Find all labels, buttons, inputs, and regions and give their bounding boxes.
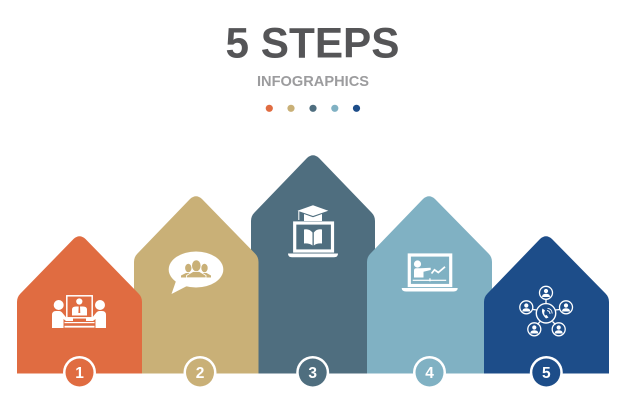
subtitle: INFOGRAPHICS [257,73,369,90]
badge: step 2 [184,356,216,389]
icon: video meeting [52,296,106,328]
badge: step 1: 1 [75,365,84,382]
legend dots [266,105,360,112]
icon: graduation cap on laptop with book [288,205,338,257]
panel: step 4 [367,196,492,374]
panel: step 2 [134,196,258,374]
badge: step 1 [63,356,96,389]
badge: step 4 [413,356,446,389]
badge: step 5 [530,356,563,389]
icon: speech bubble with group [169,252,223,294]
icon: phone network [520,286,572,336]
title: 5 STEPS [226,20,400,68]
panel: step 1 [17,236,142,374]
panel: step 3 [251,155,375,374]
badge: step 5: 5 [542,365,551,382]
icon: presentation on laptop [402,255,458,292]
panel: step 5 [484,236,609,374]
badge: step 4: 4 [425,365,434,382]
badge: step 3: 3 [308,365,317,382]
badge: step 3 [296,356,329,389]
badge: step 2: 2 [196,365,204,382]
